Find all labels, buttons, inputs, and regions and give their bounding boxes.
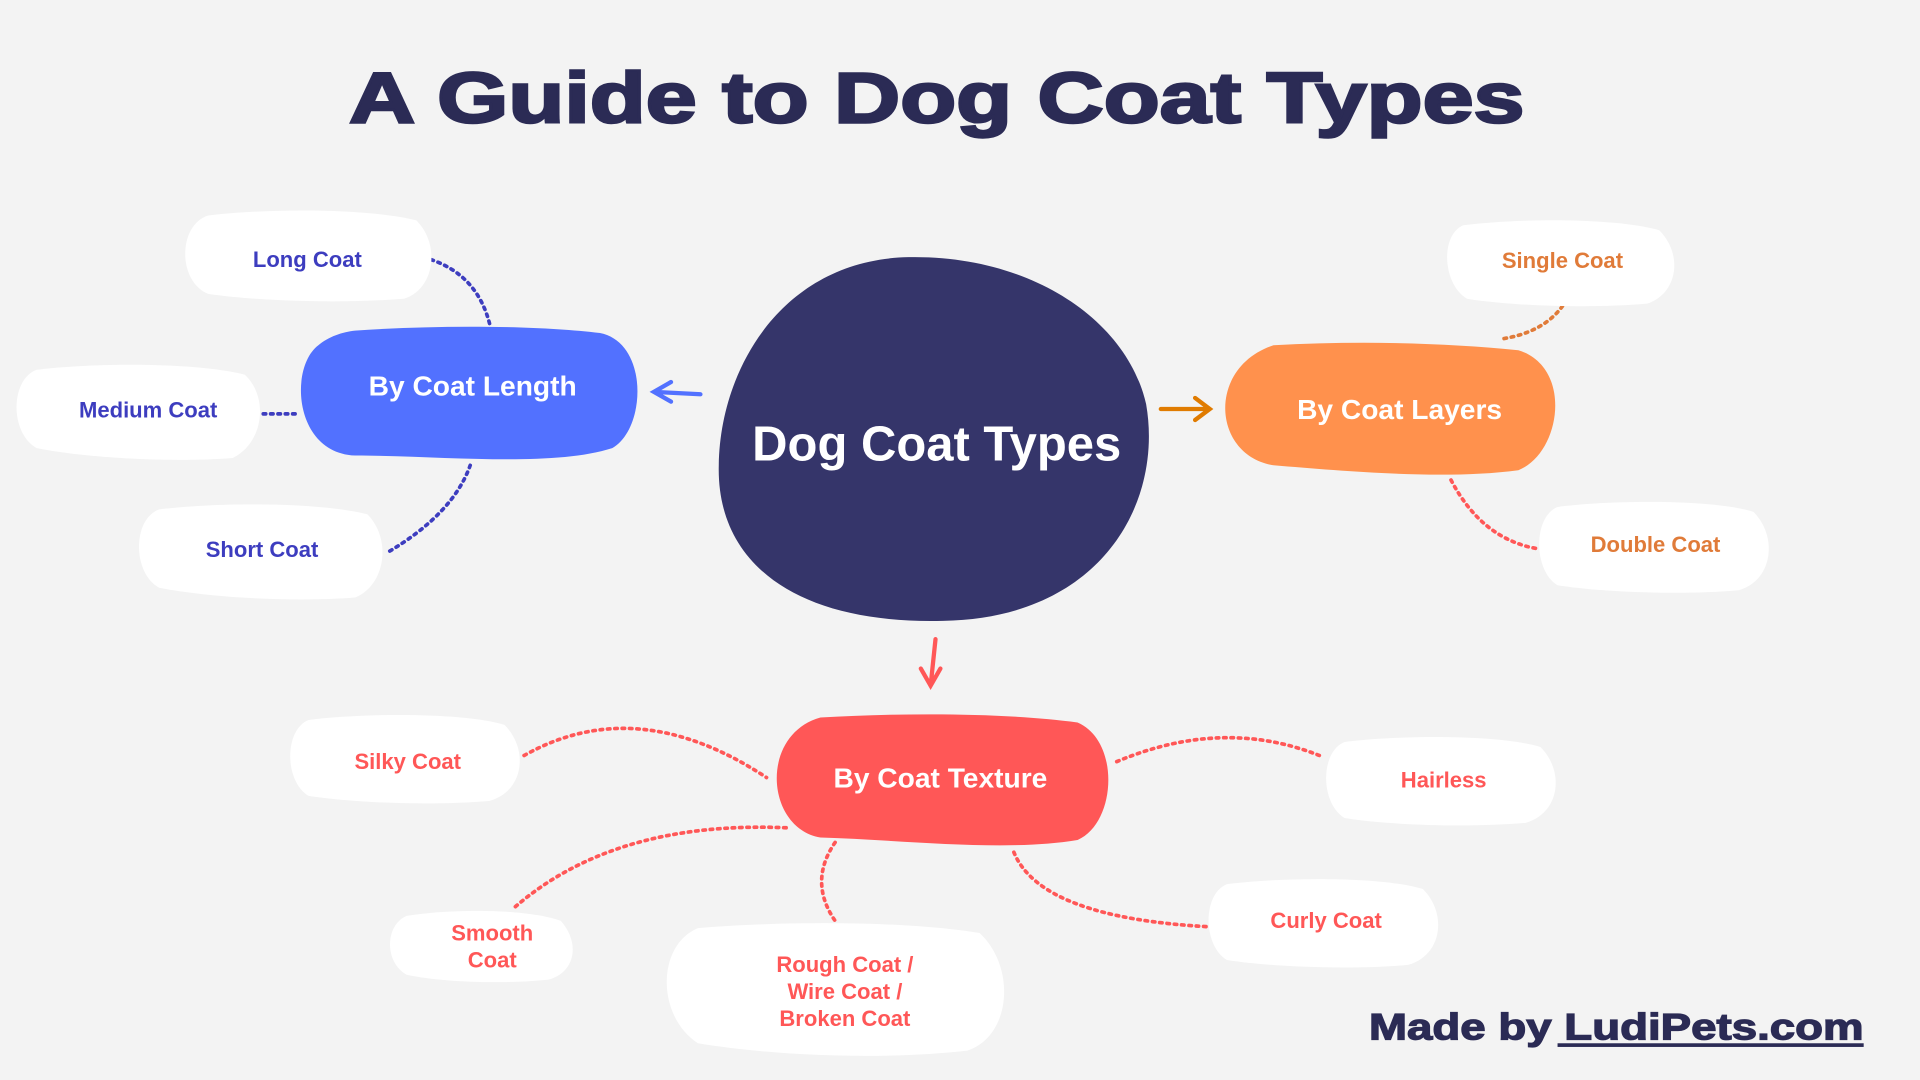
- leaf: single coat: [1447, 220, 1674, 306]
- leaf: long coat: Long Coat: [253, 247, 362, 272]
- leaf nodes: [17, 210, 1769, 1056]
- leaf: hairless: Hairless: [1401, 767, 1487, 792]
- leaf: short coat: Short Coat: [206, 537, 319, 562]
- leaf: hairless: [1326, 737, 1556, 825]
- center blob: Dog Coat Types: [752, 417, 1121, 471]
- leaf: single coat: Single Coat: [1502, 248, 1624, 273]
- node: by coat length: [301, 327, 637, 459]
- node: by coat layers: [1225, 343, 1555, 475]
- node: by coat layers: By Coat Layers: [1297, 394, 1502, 425]
- leaf: long coat: [185, 210, 431, 301]
- leaf: smooth coat: Smooth: [451, 920, 533, 945]
- arrow: left: [654, 382, 700, 402]
- leaf: medium coat: [17, 365, 260, 460]
- title: A Guide to Dog Coat Types: [349, 59, 1524, 138]
- leaf: double coat: Double Coat: [1591, 532, 1721, 557]
- leaf: smooth coat: [390, 911, 573, 982]
- leaf: rough coat: [667, 923, 1004, 1056]
- connectors: [263, 260, 1562, 927]
- arrow: down: [921, 639, 940, 686]
- center blob: [719, 257, 1149, 621]
- leaf: silky coat: [290, 715, 520, 803]
- footer credit: Made by LudiPets.com: [1369, 1007, 1864, 1048]
- leaf: medium coat: Medium Coat: [79, 398, 218, 423]
- leaf: rough coat: Wire Coat /: [787, 979, 902, 1004]
- leaf: curly coat: [1209, 879, 1438, 967]
- leaf: smooth coat: Coat: [468, 947, 517, 972]
- arrow: right: [1161, 398, 1210, 420]
- leaf: short coat: [139, 504, 382, 599]
- leaf: rough coat: Broken Coat: [779, 1006, 911, 1031]
- node: by coat texture: By Coat Texture: [833, 762, 1047, 793]
- leaf: silky coat: Silky Coat: [354, 749, 462, 774]
- node: by coat texture: [777, 714, 1108, 845]
- leaf: double coat: [1539, 502, 1769, 593]
- leaf: curly coat: Curly Coat: [1270, 908, 1382, 933]
- leaf: rough coat: Rough Coat /: [776, 952, 913, 977]
- node: by coat length: By Coat Length: [369, 371, 577, 402]
